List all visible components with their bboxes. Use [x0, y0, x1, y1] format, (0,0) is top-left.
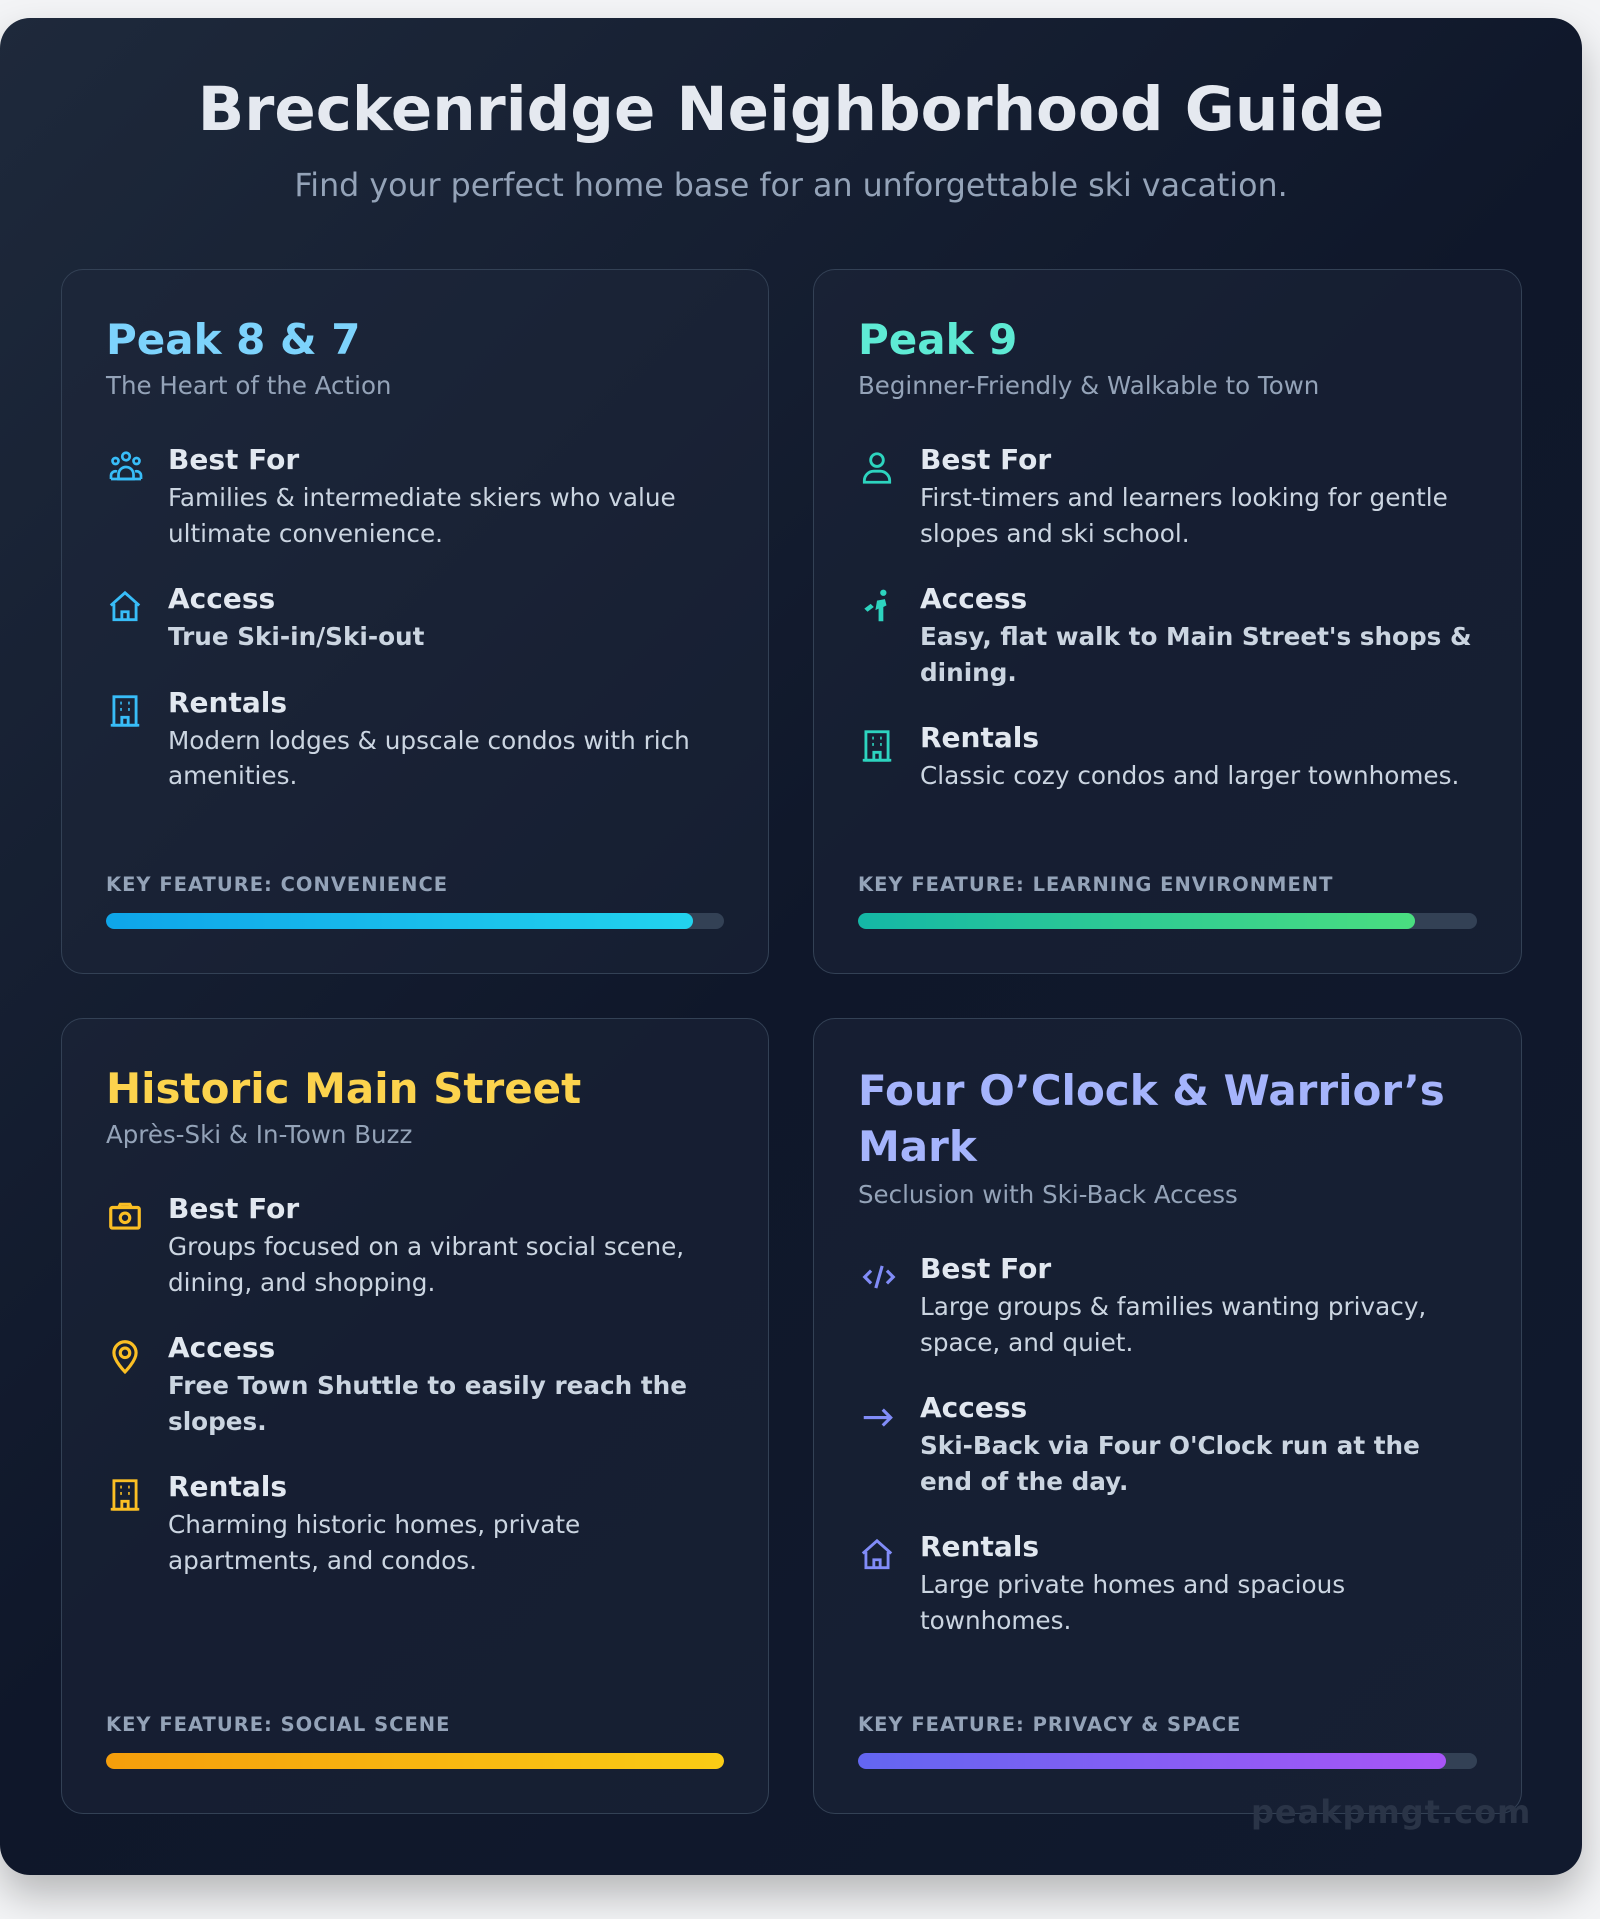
key feature bar: KEY FEATURE: PRIVACY & SPACE — [858, 1713, 1241, 1736]
item: best for: Groups focused on a vibrant social scene, dining, and shopping. — [168, 1232, 684, 1296]
heading: Peak 9 — [858, 315, 1017, 364]
tagline: Beginner-Friendly & Walkable to Town — [858, 371, 1319, 400]
item: rentals: Classic cozy condos and larger townhomes. — [920, 761, 1459, 790]
title: Breckenridge Neighborhood Guide — [198, 74, 1384, 145]
item: rentals: Rentals — [920, 1530, 1039, 1563]
item: access — [864, 1391, 1420, 1496]
tagline: Seclusion with Ski-Back Access — [858, 1180, 1238, 1209]
item: best for — [110, 443, 676, 548]
item: best for: Best For — [168, 443, 299, 476]
item: best for — [862, 443, 1448, 548]
panel: Peak 8 & 7 — [61, 269, 769, 974]
item: rentals: Rentals — [168, 686, 287, 718]
panel: Four O'Clock & Warrior's Mark — [813, 1018, 1522, 1814]
item: best for — [862, 1252, 1426, 1356]
item: access: slopes. — [168, 1406, 267, 1436]
item: access: True Ski-in/Ski-out — [168, 622, 424, 651]
watermark: peakpmgt.com — [1251, 1793, 1531, 1831]
item: access: Free Town Shuttle to easily reach the — [168, 1371, 687, 1400]
item: access: Easy, flat walk to Main Street's shops & — [920, 622, 1472, 651]
item: rentals: Rentals — [168, 1470, 287, 1503]
heading: Peak 8 & 7 — [106, 315, 360, 364]
tagline: The Heart of the Action — [106, 371, 391, 400]
item: rentals: Modern lodges & upscale condos with rich amenities. — [168, 726, 690, 790]
item: rentals — [110, 686, 690, 790]
items — [862, 443, 1472, 790]
item: access — [864, 582, 1472, 686]
items — [862, 1252, 1426, 1634]
item: rentals: apartments, and condos. — [168, 1546, 477, 1574]
item: rentals: Large private homes and spacious — [920, 1570, 1345, 1599]
item: best for — [109, 1192, 684, 1296]
item: best for: Families & intermediate skiers who value ultimate convenience. — [168, 483, 676, 548]
key feature bar — [858, 1713, 1477, 1769]
heading: Four O’Clock & Warrior’s Mark — [858, 1066, 1445, 1171]
item: access: Ski-Back via Four O'Clock run at the — [920, 1431, 1420, 1460]
panel: Peak 9 — [813, 269, 1522, 974]
item: rentals: Charming historic homes, private — [168, 1510, 580, 1539]
item: access — [110, 582, 424, 651]
key feature bar: KEY FEATURE: SOCIAL SCENE — [106, 1713, 450, 1736]
heading: Historic Main Street — [106, 1064, 581, 1113]
items — [110, 443, 690, 790]
item: rentals — [862, 1530, 1345, 1634]
items — [109, 1192, 687, 1574]
item: best for: Best For — [920, 443, 1051, 476]
key feature bar — [858, 873, 1477, 929]
key feature bar — [106, 1713, 724, 1769]
item: access — [112, 1331, 687, 1436]
item: best for: Large groups & families wanting privacy, — [920, 1292, 1426, 1321]
item: rentals: townhomes. — [920, 1606, 1071, 1634]
key feature bar — [106, 873, 724, 929]
key feature bar: KEY FEATURE: LEARNING ENVIRONMENT — [858, 873, 1333, 896]
subtitle: Find your perfect home base for an unforgettable ski vacation. — [294, 168, 1288, 204]
item: rentals: Rentals — [920, 721, 1039, 754]
panel: Historic Main Street — [61, 1018, 769, 1814]
item: access: end of the day. — [920, 1466, 1128, 1496]
item: rentals — [110, 1470, 580, 1574]
item: access: Access — [920, 582, 1027, 615]
item: access: Access — [168, 582, 275, 615]
item: rentals — [862, 721, 1459, 790]
item: access: dining. — [920, 658, 1017, 686]
key feature bar: KEY FEATURE: CONVENIENCE — [106, 873, 448, 896]
item: access: Access — [168, 1331, 275, 1364]
item: best for: Best For — [168, 1192, 299, 1225]
item: best for: space, and quiet. — [920, 1328, 1133, 1356]
item: access: Access — [920, 1391, 1027, 1424]
item: best for: Best For — [920, 1252, 1051, 1285]
tagline: Après-Ski & In-Town Buzz — [106, 1120, 412, 1149]
item: best for: First-timers and learners looking for gentle slopes and ski school. — [920, 483, 1448, 548]
